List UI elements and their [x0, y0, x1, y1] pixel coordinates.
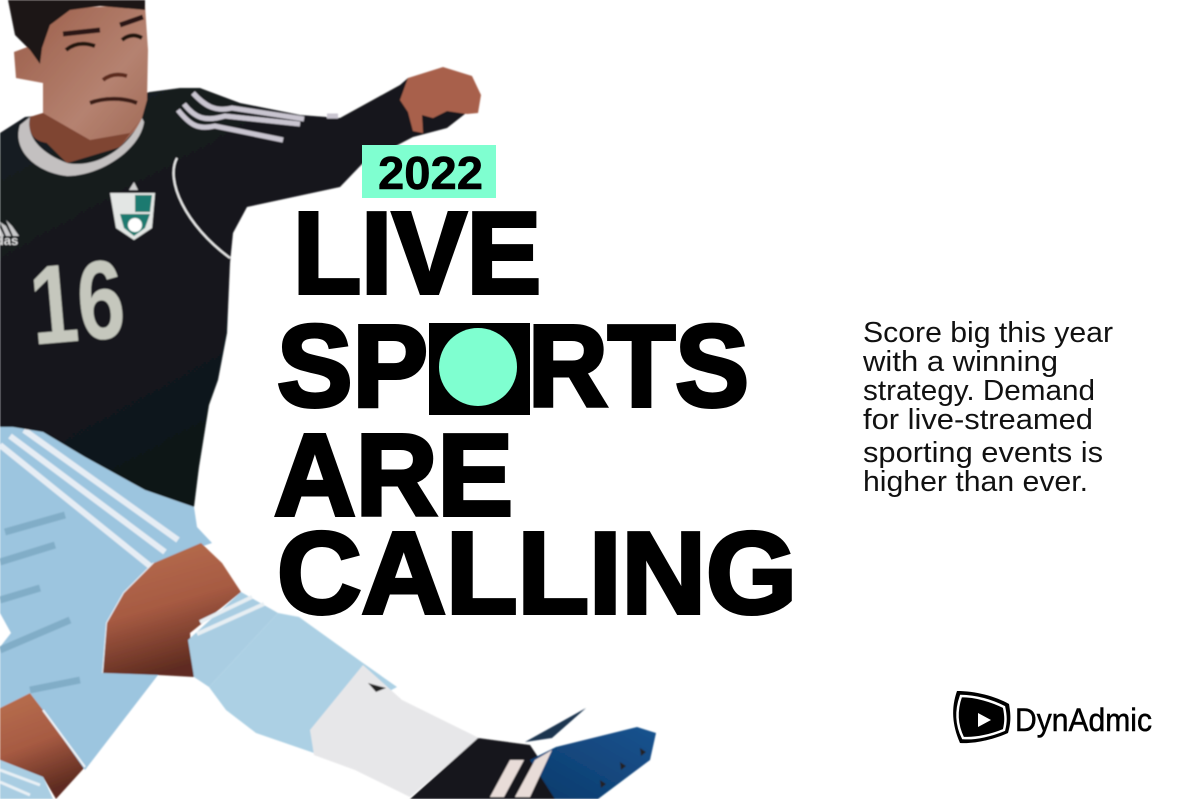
- sock: [188, 592, 479, 797]
- player photo illustration: [0, 0, 656, 799]
- description text: strategy. Demand: [863, 375, 1095, 407]
- description text: Score big this year: [863, 317, 1113, 349]
- title: CALLING: [277, 508, 797, 638]
- description text: with a winning: [862, 346, 1058, 378]
- back leg: [0, 693, 85, 799]
- head: [8, 0, 148, 176]
- description text: for live-streamed: [863, 404, 1093, 436]
- wordmark: DynAdmic: [1015, 702, 1152, 738]
- jersey crest: [110, 182, 155, 240]
- icon: play screen: [953, 691, 1010, 743]
- jersey brand: [0, 220, 19, 248]
- title: SP: [277, 301, 428, 431]
- boot: [410, 708, 656, 799]
- O replaced by square with circle: [429, 323, 530, 415]
- description text: higher than ever.: [863, 466, 1088, 498]
- front thigh and knee: [103, 543, 241, 677]
- description text: [862, 317, 1113, 498]
- jersey number: 16: [25, 236, 129, 369]
- shorts: [0, 427, 212, 770]
- description text: sporting events is: [863, 437, 1103, 469]
- DynAdmic logo: [953, 691, 1152, 743]
- year badge: 2022: [378, 147, 483, 199]
- title: RTS: [528, 301, 749, 431]
- title: ARE: [274, 410, 513, 540]
- title: LIVE: [293, 188, 541, 318]
- title: [274, 188, 797, 638]
- hand: [400, 67, 481, 133]
- jersey: [0, 78, 470, 507]
